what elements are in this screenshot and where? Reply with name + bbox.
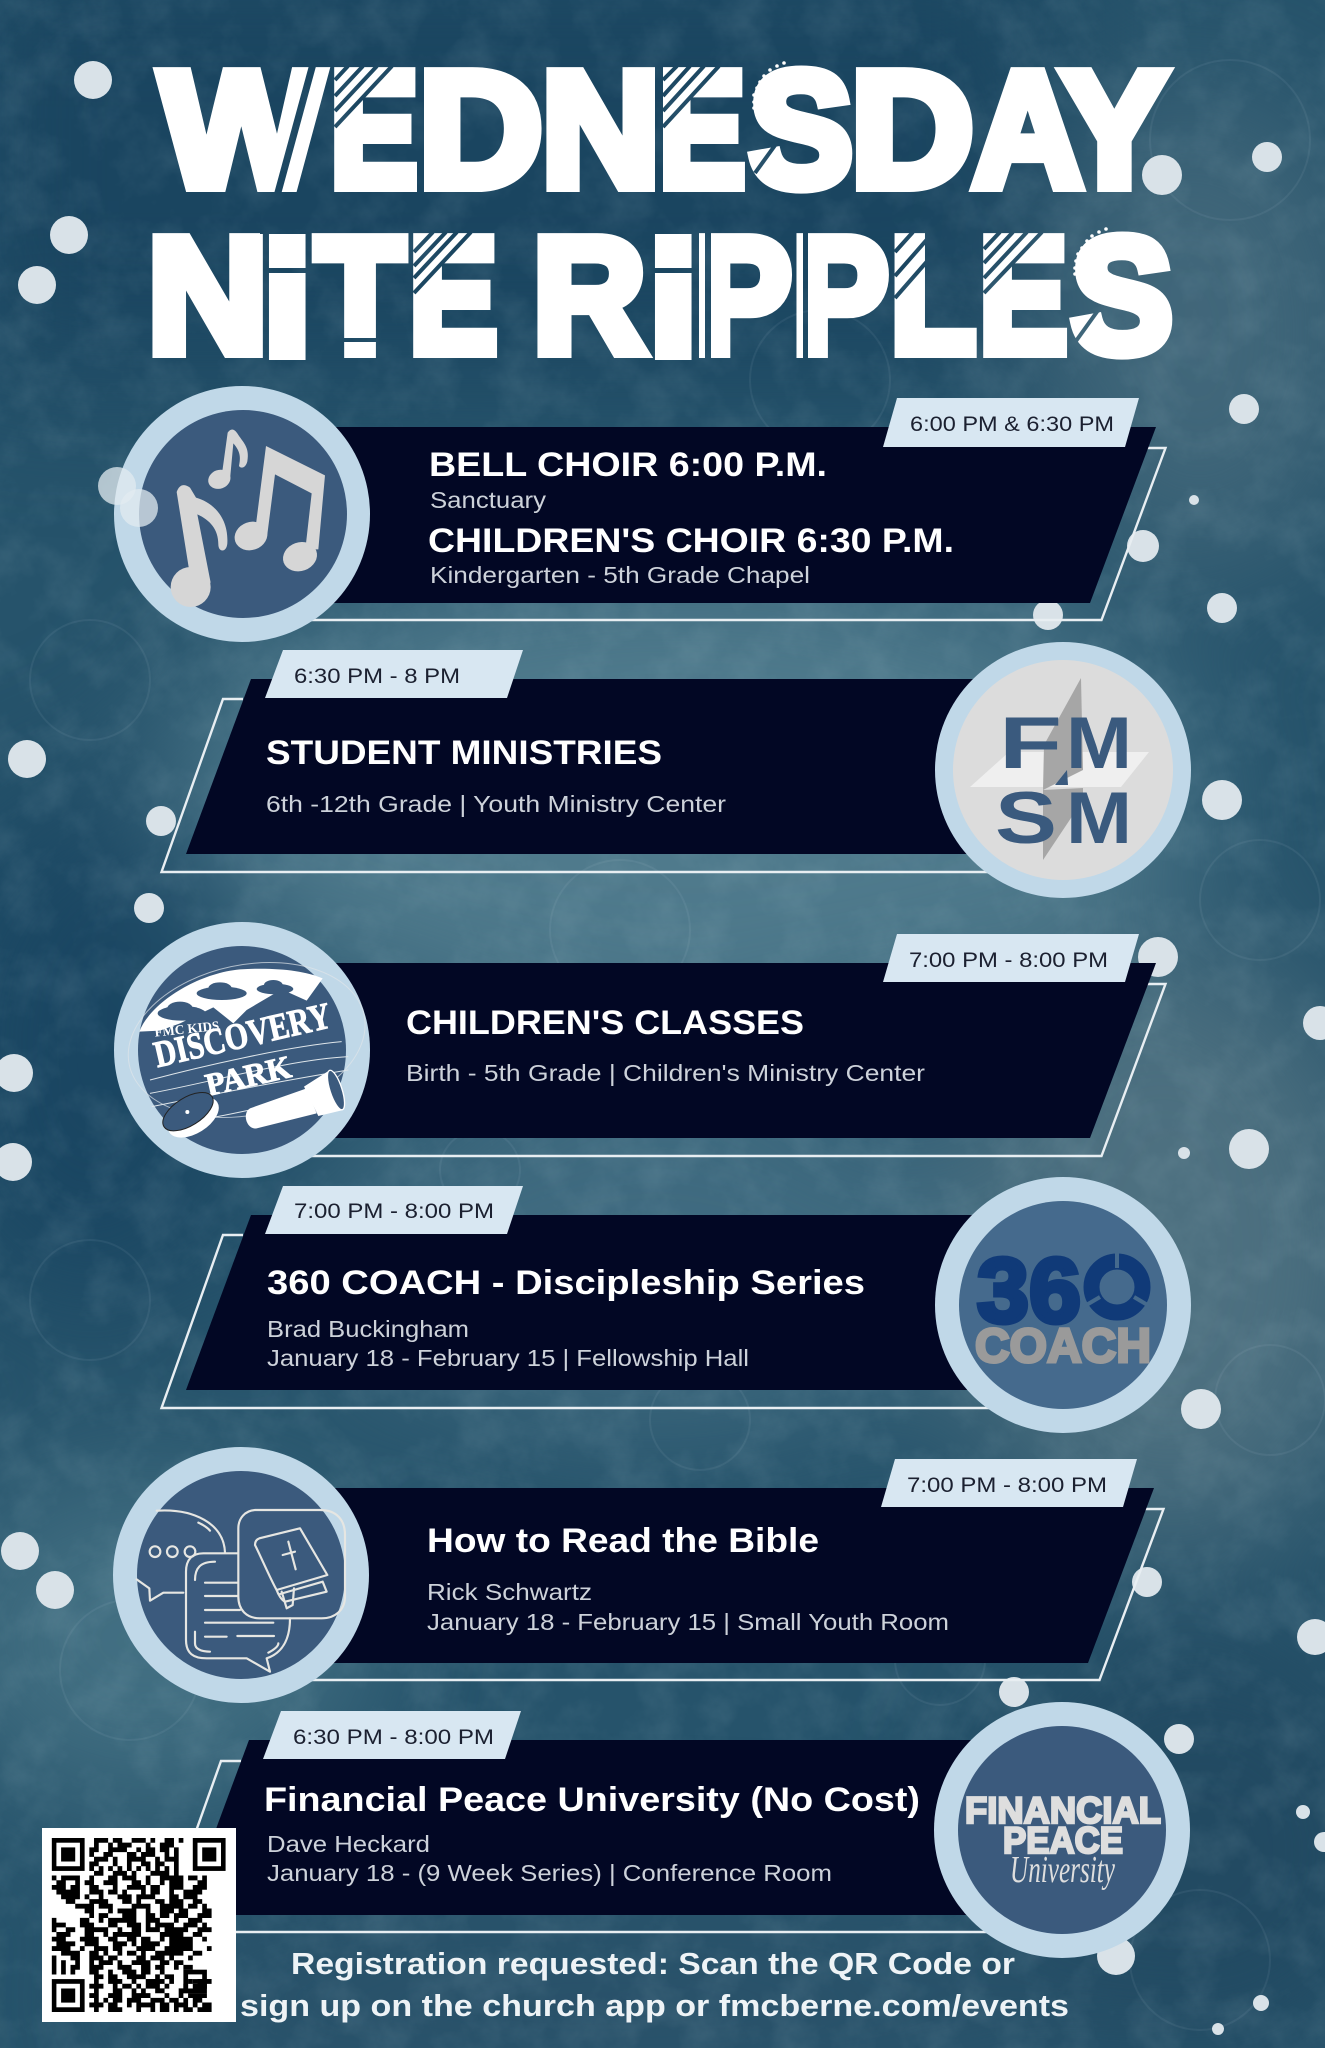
panel: bell and children's choir: CHILDREN'S CHOIR 6:30 P.M. — [428, 522, 954, 560]
icon: financial peace logo: FINANCIAL — [965, 1790, 1161, 1831]
icon: Discovery Park logo: PARK — [202, 1048, 294, 1103]
panel: student ministries — [162, 650, 1000, 872]
time tag: 6:00 PM & 6:30 PM: 6:00 PM & 6:30 PM — [910, 413, 1114, 436]
footer registration text — [240, 1946, 1069, 2023]
time tag: 6:00 PM & 6:30 PM — [883, 398, 1139, 447]
panel: student ministries: 6th -12th Grade | Youth Ministry Center — [266, 791, 726, 817]
icon: 360 coach logo — [935, 1177, 1191, 1433]
title: E — [979, 204, 1067, 387]
time tag: 7:00 PM - 8:00 PM — [883, 934, 1139, 982]
time tag: 7:00 PM - 8:00 PM: 7:00 PM - 8:00 PM — [909, 949, 1108, 972]
time tag: 6:30 PM - 8 PM: 6:30 PM - 8 PM — [294, 665, 460, 688]
title: R — [533, 204, 646, 387]
panel: 360 coach discipleship: Brad Buckingham — [267, 1316, 469, 1342]
overlay dots on music icon — [98, 467, 158, 527]
title: E — [658, 38, 745, 221]
QR code — [42, 1828, 236, 2022]
footer registration text: sign up on the church app or fmcberne.com/events — [240, 1988, 1069, 2023]
panel: how to read the bible: January 18 - February 15 | Small Youth Room — [427, 1609, 949, 1635]
panel: student ministries: STUDENT MINISTRIES — [266, 734, 662, 772]
panel: bell and children's choir: Sanctuary — [430, 487, 547, 513]
panel: financial peace university: Financial Peace University (No Cost) — [264, 1781, 920, 1819]
time tag: 6:30 PM - 8:00 PM — [263, 1711, 521, 1759]
title: S — [749, 38, 853, 221]
icon: financial peace logo: PEACE — [1003, 1820, 1123, 1861]
icon: Discovery Park logo — [114, 922, 380, 1178]
title: i — [652, 204, 695, 387]
title: D — [851, 38, 974, 221]
title: i — [266, 204, 309, 387]
time tag: 6:30 PM - 8 PM — [265, 650, 523, 698]
panel: bell and children's choir — [300, 398, 1166, 620]
panel: 360 coach discipleship: 360 COACH - Discipleship Series — [267, 1264, 865, 1302]
title: P — [792, 204, 889, 387]
title: A — [973, 38, 1083, 221]
panel: financial peace university: January 18 - (9 Week Series) | Conference Room — [267, 1860, 832, 1886]
panel: 360 coach discipleship — [162, 1186, 1000, 1408]
panel: how to read the bible: Rick Schwartz — [427, 1579, 592, 1605]
title: D — [418, 38, 542, 221]
flashlight — [246, 1068, 348, 1128]
panel: bell and children's choir: BELL CHOIR 6:00 P.M. — [429, 446, 827, 484]
panel: children's classes: Birth - 5th Grade | Children's Ministry Center — [406, 1060, 925, 1086]
title: N — [541, 38, 661, 221]
time tag: 6:30 PM - 8:00 PM: 6:30 PM - 8:00 PM — [293, 1726, 494, 1749]
footer registration text: Registration requested: Scan the QR Code or — [291, 1946, 1015, 1981]
time tag: 7:00 PM - 8:00 PM: 7:00 PM - 8:00 PM — [907, 1474, 1107, 1497]
title: W — [160, 38, 323, 221]
icon: financial peace logo — [934, 1702, 1190, 1958]
compass — [157, 1085, 226, 1146]
title: N — [147, 204, 268, 387]
title: P — [694, 204, 792, 387]
icon: FMSM logo: S — [995, 778, 1057, 859]
icon: 360 coach logo: COACH — [975, 1320, 1151, 1373]
icon: FMSM logo: M — [1066, 703, 1132, 784]
icon: Discovery Park logo: FMC KIDS — [154, 1018, 220, 1040]
time tag: 7:00 PM - 8:00 PM — [265, 1186, 523, 1234]
title: T — [315, 204, 405, 387]
icon: Discovery Park logo: DISCOVERY — [150, 996, 335, 1076]
icon: FMSM logo: F — [999, 703, 1062, 784]
icon: FMSM logo: M — [1066, 778, 1132, 859]
title: E — [330, 38, 418, 221]
panel: financial peace university — [160, 1711, 1000, 1932]
title: E — [409, 204, 497, 387]
panel: how to read the bible: How to Read the Bible — [427, 1522, 819, 1560]
dot over title — [1142, 155, 1182, 195]
title: Y — [1061, 38, 1167, 221]
icon: bible and speech bubbles — [113, 1447, 369, 1703]
panel: financial peace university: Dave Heckard — [267, 1831, 430, 1857]
title: S — [1071, 204, 1173, 387]
panel: children's classes — [300, 934, 1166, 1156]
title — [152, 61, 1176, 360]
icon: FMSM logo — [935, 642, 1191, 898]
icon: music notes — [114, 386, 370, 642]
icon: 360 coach logo: 36 — [977, 1240, 1081, 1342]
icon: financial peace logo: University — [1010, 1849, 1115, 1891]
time tag: 7:00 PM - 8:00 PM: 7:00 PM - 8:00 PM — [294, 1200, 494, 1223]
panel: how to read the bible — [298, 1459, 1164, 1680]
panel: bell and children's choir: Kindergarten - 5th Grade Chapel — [430, 562, 810, 588]
panel: children's classes: CHILDREN'S CLASSES — [406, 1004, 804, 1042]
time tag: 7:00 PM - 8:00 PM — [881, 1459, 1137, 1507]
panel: 360 coach discipleship: January 18 - February 15 | Fellowship Hall — [267, 1345, 749, 1371]
title: L — [890, 204, 976, 387]
